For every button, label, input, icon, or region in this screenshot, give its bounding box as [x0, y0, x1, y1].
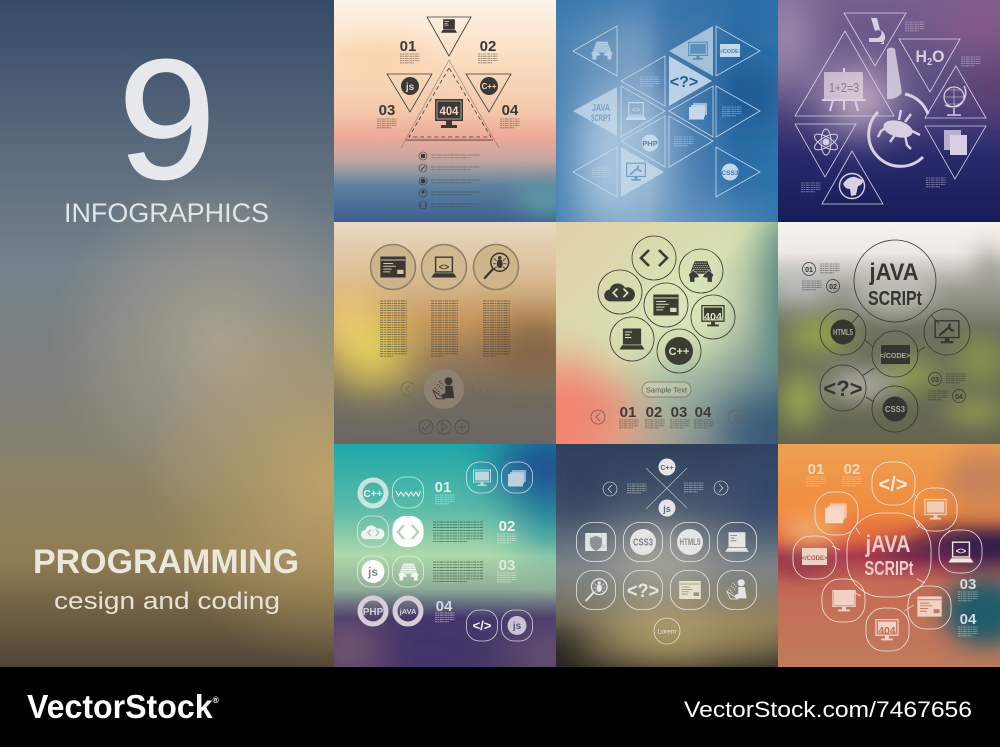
circle: java script: jAVA — [869, 259, 918, 286]
circle: HTML5: HTML5 — [833, 328, 853, 337]
step 02 — [497, 518, 517, 543]
circle: code: </CODE> — [880, 353, 910, 360]
step 03 — [928, 372, 966, 386]
action buttons — [419, 420, 469, 434]
step 04 — [928, 390, 966, 402]
triangle: earth — [822, 151, 883, 204]
pill: sample text — [642, 382, 691, 397]
bubble: 404 — [691, 295, 735, 339]
step 03: 03 — [499, 557, 515, 574]
filled triangle: binary monitor — [669, 26, 713, 76]
footer brand: VectorStock — [27, 688, 218, 725]
icon: CSS3 — [624, 522, 662, 562]
ring connectors — [832, 494, 950, 611]
step 03 — [958, 576, 978, 601]
blob: browser window — [908, 586, 951, 629]
panel background — [766, 444, 1000, 667]
bubble: code brackets — [632, 236, 676, 280]
numbers row — [619, 404, 714, 428]
central triangle with 404 monitor: 404 — [440, 104, 459, 118]
circle: browser window — [370, 244, 416, 290]
icon: code brackets filled — [392, 516, 424, 547]
icon: PHP ring — [360, 598, 386, 624]
bubble: C++: C++ — [669, 346, 689, 358]
step 01: 01 — [435, 479, 451, 496]
panel: slate rounded icons — [520, 444, 796, 672]
panel: triangles with 404 — [330, 0, 575, 222]
step 04 — [500, 102, 520, 128]
step 04: 04 — [955, 394, 963, 401]
heading: infographics: INFOGRAPHICS — [64, 198, 269, 228]
panel background — [323, 432, 600, 667]
circle: java script: SCRIPt — [868, 288, 922, 310]
triangle: documents — [925, 126, 986, 179]
icon: CSS3: CSS3 — [633, 538, 653, 548]
panel background — [761, 0, 1000, 222]
heading: programming: PROGRAMMING — [33, 543, 299, 581]
triangle: H2O: 2 — [927, 57, 933, 68]
circle: question tag: <?> — [823, 376, 863, 401]
icon: windows — [502, 462, 532, 493]
icon: closing tag — [466, 610, 498, 641]
footer image id: VectorStock.com/7467656 — [684, 697, 972, 722]
subheading: cesign and coding — [54, 588, 280, 615]
triangle: H2O: O — [932, 47, 944, 66]
numbers row: 03 — [671, 404, 687, 421]
circle: code — [872, 331, 918, 377]
triangle: js — [387, 74, 432, 112]
filled triangle: java script: SCRIPT — [591, 113, 611, 123]
panel background — [520, 444, 796, 672]
filled triangle: wrench monitor — [621, 147, 664, 197]
panel: three circles with text columns — [334, 222, 556, 444]
icon: cloud — [358, 516, 388, 547]
top circle: C++ — [658, 458, 676, 476]
panel: teal rounded icons — [323, 432, 600, 667]
icon: js — [502, 610, 532, 641]
panel background — [334, 222, 556, 444]
triangle: C++ — [466, 74, 511, 112]
triangle: text — [716, 86, 760, 137]
magnifier with bug — [869, 48, 928, 166]
panel: java script network — [770, 222, 1000, 444]
panel: orange java script ring — [766, 444, 1000, 667]
centre circle: reader — [424, 369, 464, 409]
navigation arrows — [401, 382, 487, 396]
triangle: presentation board — [795, 31, 894, 116]
step 01 — [806, 461, 826, 486]
step 02: 02 — [844, 461, 860, 478]
triangle: H2O — [899, 39, 960, 92]
step 02 — [478, 38, 498, 63]
blob: 404: 404 — [878, 626, 896, 637]
numbers row: 01 — [620, 404, 636, 421]
centre blob: java script: SCRIPt — [864, 558, 914, 580]
blob: code box — [793, 536, 836, 579]
centre blob: java script: jAVA — [865, 531, 910, 558]
icon: browser window — [670, 570, 710, 610]
step 04: 04 — [960, 611, 977, 628]
triangle: C++: C++ — [481, 82, 497, 91]
triangle: microscope — [844, 13, 906, 66]
icon: java ring — [395, 598, 421, 624]
triangle: code box: </CODE> — [718, 49, 742, 55]
triangle: globe — [925, 66, 986, 118]
icon: js: js — [367, 565, 378, 579]
step 03 — [377, 102, 397, 128]
step 01 — [802, 262, 840, 276]
cross lines — [646, 468, 687, 509]
circle: CSS3 — [872, 386, 918, 432]
triangle: atom — [795, 124, 856, 177]
step 02 — [802, 280, 840, 292]
blob: laptop: <> — [956, 546, 966, 556]
bubble: C++ — [657, 329, 701, 373]
triangle: CSS3 — [716, 147, 760, 197]
icon: laptop — [718, 522, 756, 562]
step 04: 04 — [436, 598, 453, 615]
step 04 — [435, 598, 455, 622]
filled triangle: question tag: <?> — [670, 74, 698, 91]
icon: question tag: <?> — [627, 581, 659, 602]
step 01: 01 — [400, 38, 416, 55]
supporting text blocks — [801, 22, 981, 192]
icon: magnifier bug — [576, 570, 616, 610]
pill: sample text: Sample Text — [646, 386, 688, 394]
icon: HTML5: HTML5 — [680, 537, 700, 547]
triangle: laptop — [621, 86, 665, 137]
step 03: 03 — [931, 377, 939, 384]
step 01: 01 — [805, 267, 813, 274]
panel background — [330, 0, 575, 222]
circle: magnifier bug — [474, 244, 518, 290]
panel background — [485, 205, 830, 490]
triangle: code box — [716, 26, 760, 76]
step 02: 02 — [829, 284, 837, 291]
bottom circle: js — [658, 500, 676, 516]
footer bar — [0, 667, 1000, 747]
blob: windows — [815, 492, 858, 535]
bubble: 404: 404 — [704, 312, 722, 323]
central triangle with 404 monitor — [401, 60, 499, 148]
step 02: 02 — [499, 518, 515, 535]
blob: wrench monitor — [822, 579, 865, 622]
numbers row: 02 — [646, 404, 662, 421]
filled triangle: question tag — [669, 56, 712, 106]
icon: HTML5 — [670, 522, 710, 562]
step 02 — [842, 461, 862, 486]
text block: upper — [433, 522, 483, 542]
icon: question tag — [624, 570, 662, 610]
numbers row: 04 — [695, 404, 712, 421]
step 03: 03 — [960, 576, 976, 593]
triangle: windows — [669, 86, 713, 137]
filled triangle: java script — [573, 87, 617, 136]
icon: js — [358, 556, 388, 587]
triangle: PHP: PHP — [642, 139, 658, 148]
circle: laptop code — [422, 244, 466, 290]
connectors — [851, 315, 939, 402]
navigation and text — [603, 481, 728, 496]
blob: laptop — [939, 530, 982, 573]
panel: purple science triangles — [761, 0, 1000, 222]
blob: 404 — [866, 608, 909, 651]
triangle: keyboard — [573, 26, 617, 76]
bottom circle: js: js — [662, 504, 671, 514]
step 04 — [958, 611, 978, 636]
centre blob: java script — [847, 513, 931, 597]
step 03 — [497, 557, 517, 582]
circle: CSS3: CSS3 — [885, 405, 906, 414]
icon: closing tag: </> — [473, 618, 492, 633]
triangle: text — [621, 56, 665, 106]
blob: closing tag: </> — [879, 474, 907, 496]
filled triangle: java script: JAVA — [592, 103, 610, 114]
icon: keyboard — [392, 556, 424, 587]
circle: laptop code: <> — [439, 262, 449, 272]
triangle: js: js — [405, 82, 415, 93]
circle: wrench monitor — [924, 309, 970, 355]
navigation arrows — [591, 410, 742, 424]
step 04: 04 — [502, 102, 519, 119]
top circle: C++: C++ — [660, 465, 674, 472]
bubble: keyboard — [679, 249, 723, 293]
triangle: text — [573, 147, 617, 197]
blob: closing tag — [872, 462, 915, 505]
step 01 — [435, 479, 455, 504]
footer brand: ® — [213, 695, 219, 705]
blob: code box: </CODE> — [801, 556, 828, 562]
circle: java script — [854, 240, 936, 322]
step 01 — [400, 41, 420, 64]
triangle: text — [669, 116, 713, 167]
circle: question tag — [820, 365, 866, 411]
bubble: laptop — [610, 317, 654, 361]
panel background — [556, 0, 778, 222]
icon: js: js — [512, 621, 522, 632]
blob: binary monitor — [914, 488, 957, 531]
circle: HTML5 — [820, 309, 866, 355]
bubble: browser window — [644, 283, 688, 327]
list of five items — [419, 152, 480, 209]
icon: java ring: jAVA — [399, 607, 417, 616]
panel: blue triangles — [556, 0, 778, 222]
triangle: laptop — [427, 17, 471, 56]
step 02: 02 — [480, 38, 496, 55]
icon: reader — [718, 570, 756, 610]
panel background — [770, 222, 1000, 444]
icon: monitor — [466, 462, 498, 493]
text block: lower — [433, 562, 483, 582]
triangle: CSS3: CSS3 — [722, 170, 739, 177]
big number 9: 9 — [118, 25, 216, 215]
triangle: H2O: H — [916, 47, 928, 66]
button: lorem: Lorem — [658, 628, 676, 636]
icon: C++ ring — [360, 480, 386, 506]
panel: left cover — [0, 0, 334, 667]
bubble: cloud — [598, 270, 642, 314]
icon: C++ ring: C++ — [364, 489, 383, 500]
step 01: 01 — [808, 461, 824, 478]
icon: shield window — [576, 522, 616, 562]
icon: PHP ring: PHP — [363, 607, 384, 618]
text columns — [380, 301, 510, 356]
triangle: presentation board: 1+2=3 — [829, 80, 859, 95]
button: lorem — [654, 618, 680, 644]
triangle: laptop: <> — [632, 107, 640, 114]
icon: www — [392, 477, 424, 508]
panel: green bubble cluster — [485, 205, 830, 490]
triangle: PHP — [621, 116, 665, 167]
step 03: 03 — [379, 102, 395, 119]
